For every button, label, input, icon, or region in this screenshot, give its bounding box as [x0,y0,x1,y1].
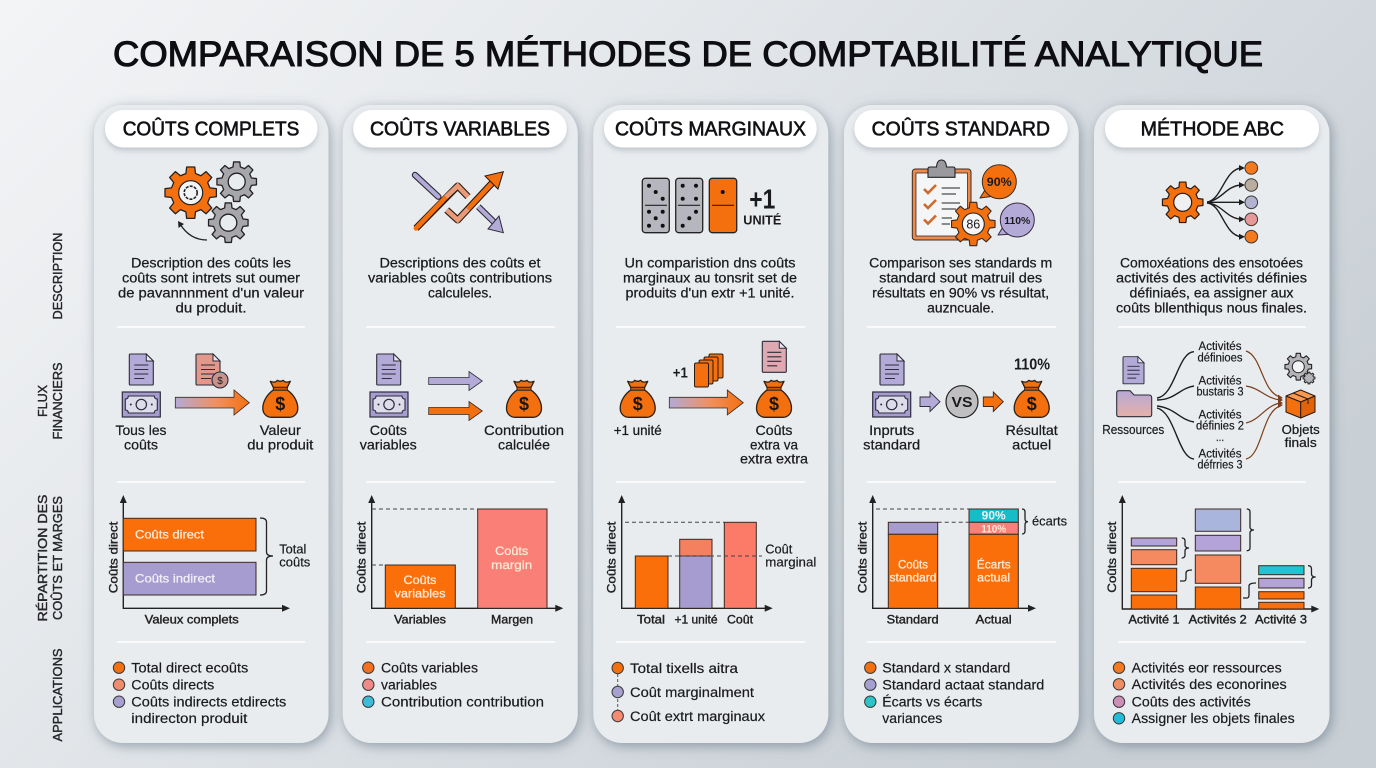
heading pill: coûts complets [105,110,318,148]
text block: description: coûts sont intrets sut oumer [122,270,301,285]
arrow [669,390,743,415]
bar chart: Activité 1 [1128,612,1180,626]
label: activités défrries 3 [1198,448,1242,471]
bar: coût [724,522,756,608]
label: résultat actuel: Résultat [1006,422,1058,438]
label: total coûts: Total [279,542,306,556]
label: résultat actuel: actuel [1012,437,1051,453]
label: coûts extra: Coûts [756,422,792,438]
bar chart [1105,495,1319,626]
text block: description: définiaés, ea assigner aux [1130,285,1294,300]
heading pill: coûts standard [854,110,1068,148]
panel: coûts variables [343,105,578,743]
label: activités définioes [1198,341,1243,365]
row labels [35,232,65,742]
text block: description: calculeles. [428,285,492,300]
heading pill: coûts variables [353,110,567,148]
icon: money bag left [620,380,655,417]
icon: invoice [196,354,228,388]
legend: Coût marginalment [630,685,754,700]
icon: dominoes plus one unit: UNITÉ [743,212,781,227]
stacked bars: activité 2 [1195,509,1241,609]
bar chart: Activité 3 [1255,612,1307,626]
bar: total [635,556,668,608]
label: objets finals: finals [1285,435,1317,450]
bar chart [106,495,310,626]
bar chart: Coûts direct [1105,521,1119,593]
bar: actual: Écarts [977,557,1011,572]
bar chart: Margen [491,612,533,626]
icon: invoice: $ [217,376,223,387]
flow diagram [116,354,313,453]
bar chart: Variables [394,612,446,626]
legend: Coûts des activités [1132,694,1251,710]
label: tous les coûts: coûts [124,437,158,453]
icon: domino stack [694,354,723,387]
icon: crossing arrows [415,172,503,233]
row label: flux financiers [36,362,65,440]
flow diagram [614,341,808,467]
label: coûts variables: Coûts [370,422,407,438]
label: inpruts standard [863,422,920,453]
heading pill: coûts variables: COÛTS VARIABLES [370,118,550,141]
icon: money bag: $ [275,394,285,414]
label: coûts variables: variables [360,437,417,453]
text block: description: variables coûts contributions [368,270,552,285]
icon: small gears [1285,353,1315,384]
legend: Coût extrt marginaux [630,709,765,724]
icon: document [377,354,401,385]
legend: Coûts variables [381,660,478,676]
bar: standard: standard [890,571,936,585]
icon: document [880,354,904,385]
label: coûts extra [740,422,808,467]
legend: Total direct ecoûts [131,660,249,676]
icon: money bag [1014,380,1049,417]
label: tous les coûts [116,422,166,453]
legend: Coûts indirects etdirects [131,694,287,710]
icon: clipboard with gear and bubbles: 90% [987,177,1012,189]
bar chart [355,495,563,626]
row label: répartition des coûts et marges [35,494,65,622]
label: ressources: Ressources [1102,423,1164,437]
flow diagram [863,354,1058,453]
icon: document [762,341,786,372]
icon: money bag right: $ [769,394,779,414]
icon: versus circle: VS [952,394,972,411]
label: tous les coûts: Tous les [116,422,166,438]
text block: description [1116,255,1307,315]
heading pill: méthode abc: MÉTHODE ABC [1141,118,1284,141]
label: contribution calculée: Contribution [484,422,564,438]
bar chart [856,495,1067,626]
text block: description: Comparison ses standards m [869,255,1052,270]
label: valeur du produit: du produit [247,437,313,453]
bar: coûts variables [385,565,455,608]
bar chart: Standard [887,612,939,626]
arrow: purple [920,392,940,412]
legend [612,661,765,724]
icon: versus circle [946,386,978,418]
bar: actual [969,509,1018,608]
legend: Contribution contribution [381,694,544,710]
text block: description: Description des coûts les [131,255,291,270]
text block: description: auzncuale. [927,300,994,315]
label: activités définioes: Activités [1198,341,1242,353]
row label: applications: APPLICATIONS [51,648,65,742]
label: coût marginal [765,542,816,570]
arrow: orange [983,392,1003,412]
text block: description [368,255,552,300]
bar: coûts margin [478,509,547,608]
icon: money bag: $ [519,394,529,414]
legend: Total tixells aitra [630,661,739,676]
bar chart: Valeux complets [145,612,239,626]
label: activités défrries 3: Activités [1198,448,1242,460]
label: contribution calculée [484,422,564,453]
legend: indirecton produit [131,711,248,726]
label: activités définies 2 [1196,409,1244,444]
bar: actual: 90% [982,510,1006,522]
arrow: purple [429,372,482,390]
panel: coûts marginaux [593,105,828,743]
text block: description: Un comparistion dns coûts [624,255,796,270]
bar chart: Coût [727,612,754,626]
bar: actual: actual [977,571,1010,585]
bar: coûts variables: Coûts [404,573,436,587]
heading pill: coûts marginaux [604,110,817,148]
bar: standard [888,522,938,608]
label: valeur du produit [247,422,313,453]
icon: folder [1117,391,1152,417]
bar chart: Actual [976,612,1012,626]
icon: banknote [370,392,408,417]
label: total coûts [279,542,310,570]
bar chart: Coûts direct [106,521,120,593]
flow diagram [360,354,564,453]
icon: document [1123,357,1144,384]
bar chart: Coûts direct [605,521,619,593]
label: total coûts: coûts [279,556,310,570]
label: plus one unit: +1 unité [614,422,662,438]
heading pill: coûts standard: COÛTS STANDARD [872,118,1050,141]
label: coût marginal: Coût [765,542,793,556]
label: résultat actuel [1006,422,1058,453]
heading pill: coûts complets: COÛTS COMPLETS [123,118,299,141]
label: valeur du produit: Valeur [260,422,301,438]
label: activités définies 2: Activités [1198,409,1242,421]
icon: money bag right [756,380,792,417]
label: objets finals: Objets [1282,422,1320,437]
icon: gear with branching arrows [1162,162,1258,243]
label: activités bustaris 3: Activités [1198,375,1242,387]
label: coûts extra: extra va [750,437,798,453]
label: écarts: écarts [1032,515,1067,529]
heading pill: coûts marginaux: COÛTS MARGINAUX [615,118,806,141]
text block: description: marginaux au tonsrit set de [623,270,797,285]
legend: Activités des econorines [1132,677,1287,692]
bar: standard: Coûts [898,558,928,572]
legend [363,660,544,710]
connectors [1157,351,1283,459]
label: activités bustaris 3: bustaris 3 [1196,387,1244,399]
label: contribution calculée: calculée [498,437,550,453]
label: activités définies 2: ... [1216,432,1224,444]
icon: clipboard with gear and bubbles [912,160,1034,246]
bar: actual: 110% [981,523,1006,535]
panel: méthode abc [1094,105,1330,743]
stacked bars: activité 1 [1131,538,1177,609]
bar chart: +1 unité [674,612,718,626]
text block: description: standard sout matruil des [879,270,1042,285]
icon: dominoes plus one unit [642,178,781,233]
stacked bars: activité 3 [1259,566,1304,609]
icon: money bag: $ [1027,394,1037,414]
text block: description [869,255,1052,315]
label: inpruts standard: standard [863,437,920,453]
icon: clipboard with gear and bubbles: 110% [1004,215,1031,227]
bar: plus one unit [680,539,712,608]
legend: Écarts vs écarts [882,694,983,710]
text block: description [118,255,305,315]
flow diagram [1102,341,1320,471]
icon: money bag [506,380,542,417]
bar: coûts margin: margin [491,558,532,572]
legend [113,660,287,726]
arrow [175,390,249,415]
text block: description: coûts bllenthiqus nous finales. [1116,300,1307,315]
text block: description: Descriptions des coûts et [380,255,541,270]
legend: Coûts directs [131,678,215,692]
icon: money bag [263,380,298,417]
bar chart [605,495,816,626]
icon: dominoes plus one unit: +1 [749,183,775,214]
text block: description [623,255,797,300]
text block: description: de pavannnment d'un valeur [118,285,305,300]
row label: flux financiers: FLUX [36,384,50,417]
legend: Standard x standard [882,660,1010,676]
text block: description: Comoxéations des ensotoées [1120,255,1303,270]
label: coûts extra: extra extra [740,451,808,467]
icon: money bag left: $ [633,394,643,414]
text block: description: résultats en 90% vs résultat, [872,285,1049,300]
icon: document [129,354,153,385]
panel: coûts complets [94,105,328,743]
label: coûts variables [360,422,417,453]
bar: coûts indirect: Coûts indirect [135,571,216,585]
text block: description: produits d'un extr +1 unité. [626,285,794,300]
label: activités définies 2: définies 2 [1196,420,1244,432]
row label: répartition des coûts et marges: RÉPARTITION DES [35,494,50,622]
label: 110 percent: 110% [1014,356,1050,373]
bar chart: Activités 2 [1189,612,1247,626]
legend [1113,660,1295,726]
label: activités définioes: définioes [1198,353,1243,365]
text block: description: activités des activités définies [1116,270,1307,285]
label: coût marginal: marginal [765,556,816,570]
arrow: orange [429,402,482,420]
bar: coûts direct [123,518,256,551]
row label: répartition des coûts et marges: COÛTS ET MARGES [50,496,65,620]
bar: coûts indirect [123,562,256,595]
icon: gears [165,162,256,242]
row label: description: DESCRIPTION [51,232,65,320]
bar: coûts variables: variables [394,587,446,601]
row label: flux financiers: FINANCIERS [51,362,65,440]
legend: Standard actaat standard [882,678,1044,692]
label: activités bustaris 3 [1196,375,1244,399]
bar: coûts margin: Coûts [495,544,528,558]
heading pill: méthode abc [1105,110,1319,148]
icon: banknote [122,392,160,417]
icon: box [1286,390,1315,418]
text block: description: du produit. [176,300,246,315]
legend: variables [381,678,437,692]
icon: clipboard with gear and bubbles: 86 [966,218,980,232]
legend [865,660,1044,726]
bar chart: Coûts direct [856,521,870,593]
title: COMPARAISON DE 5 MÉTHODES DE COMPTABILITÉ ANALYTIQUE [113,35,1263,74]
label: plus one: +1 [673,364,688,381]
bar: coûts direct: Coûts direct [135,527,205,541]
label: inpruts standard: Inpruts [869,422,914,438]
label: objets finals [1282,422,1320,450]
panel: coûts standard [844,105,1079,743]
label: activités défrries 3: défrries 3 [1198,459,1242,471]
legend: Activités eor ressources [1132,660,1282,676]
icon: banknote [873,392,911,417]
legend: variances [882,711,943,726]
legend: Assigner les objets finales [1132,711,1295,726]
bar chart: Coûts direct [355,521,369,593]
bar chart: Total [637,612,665,626]
